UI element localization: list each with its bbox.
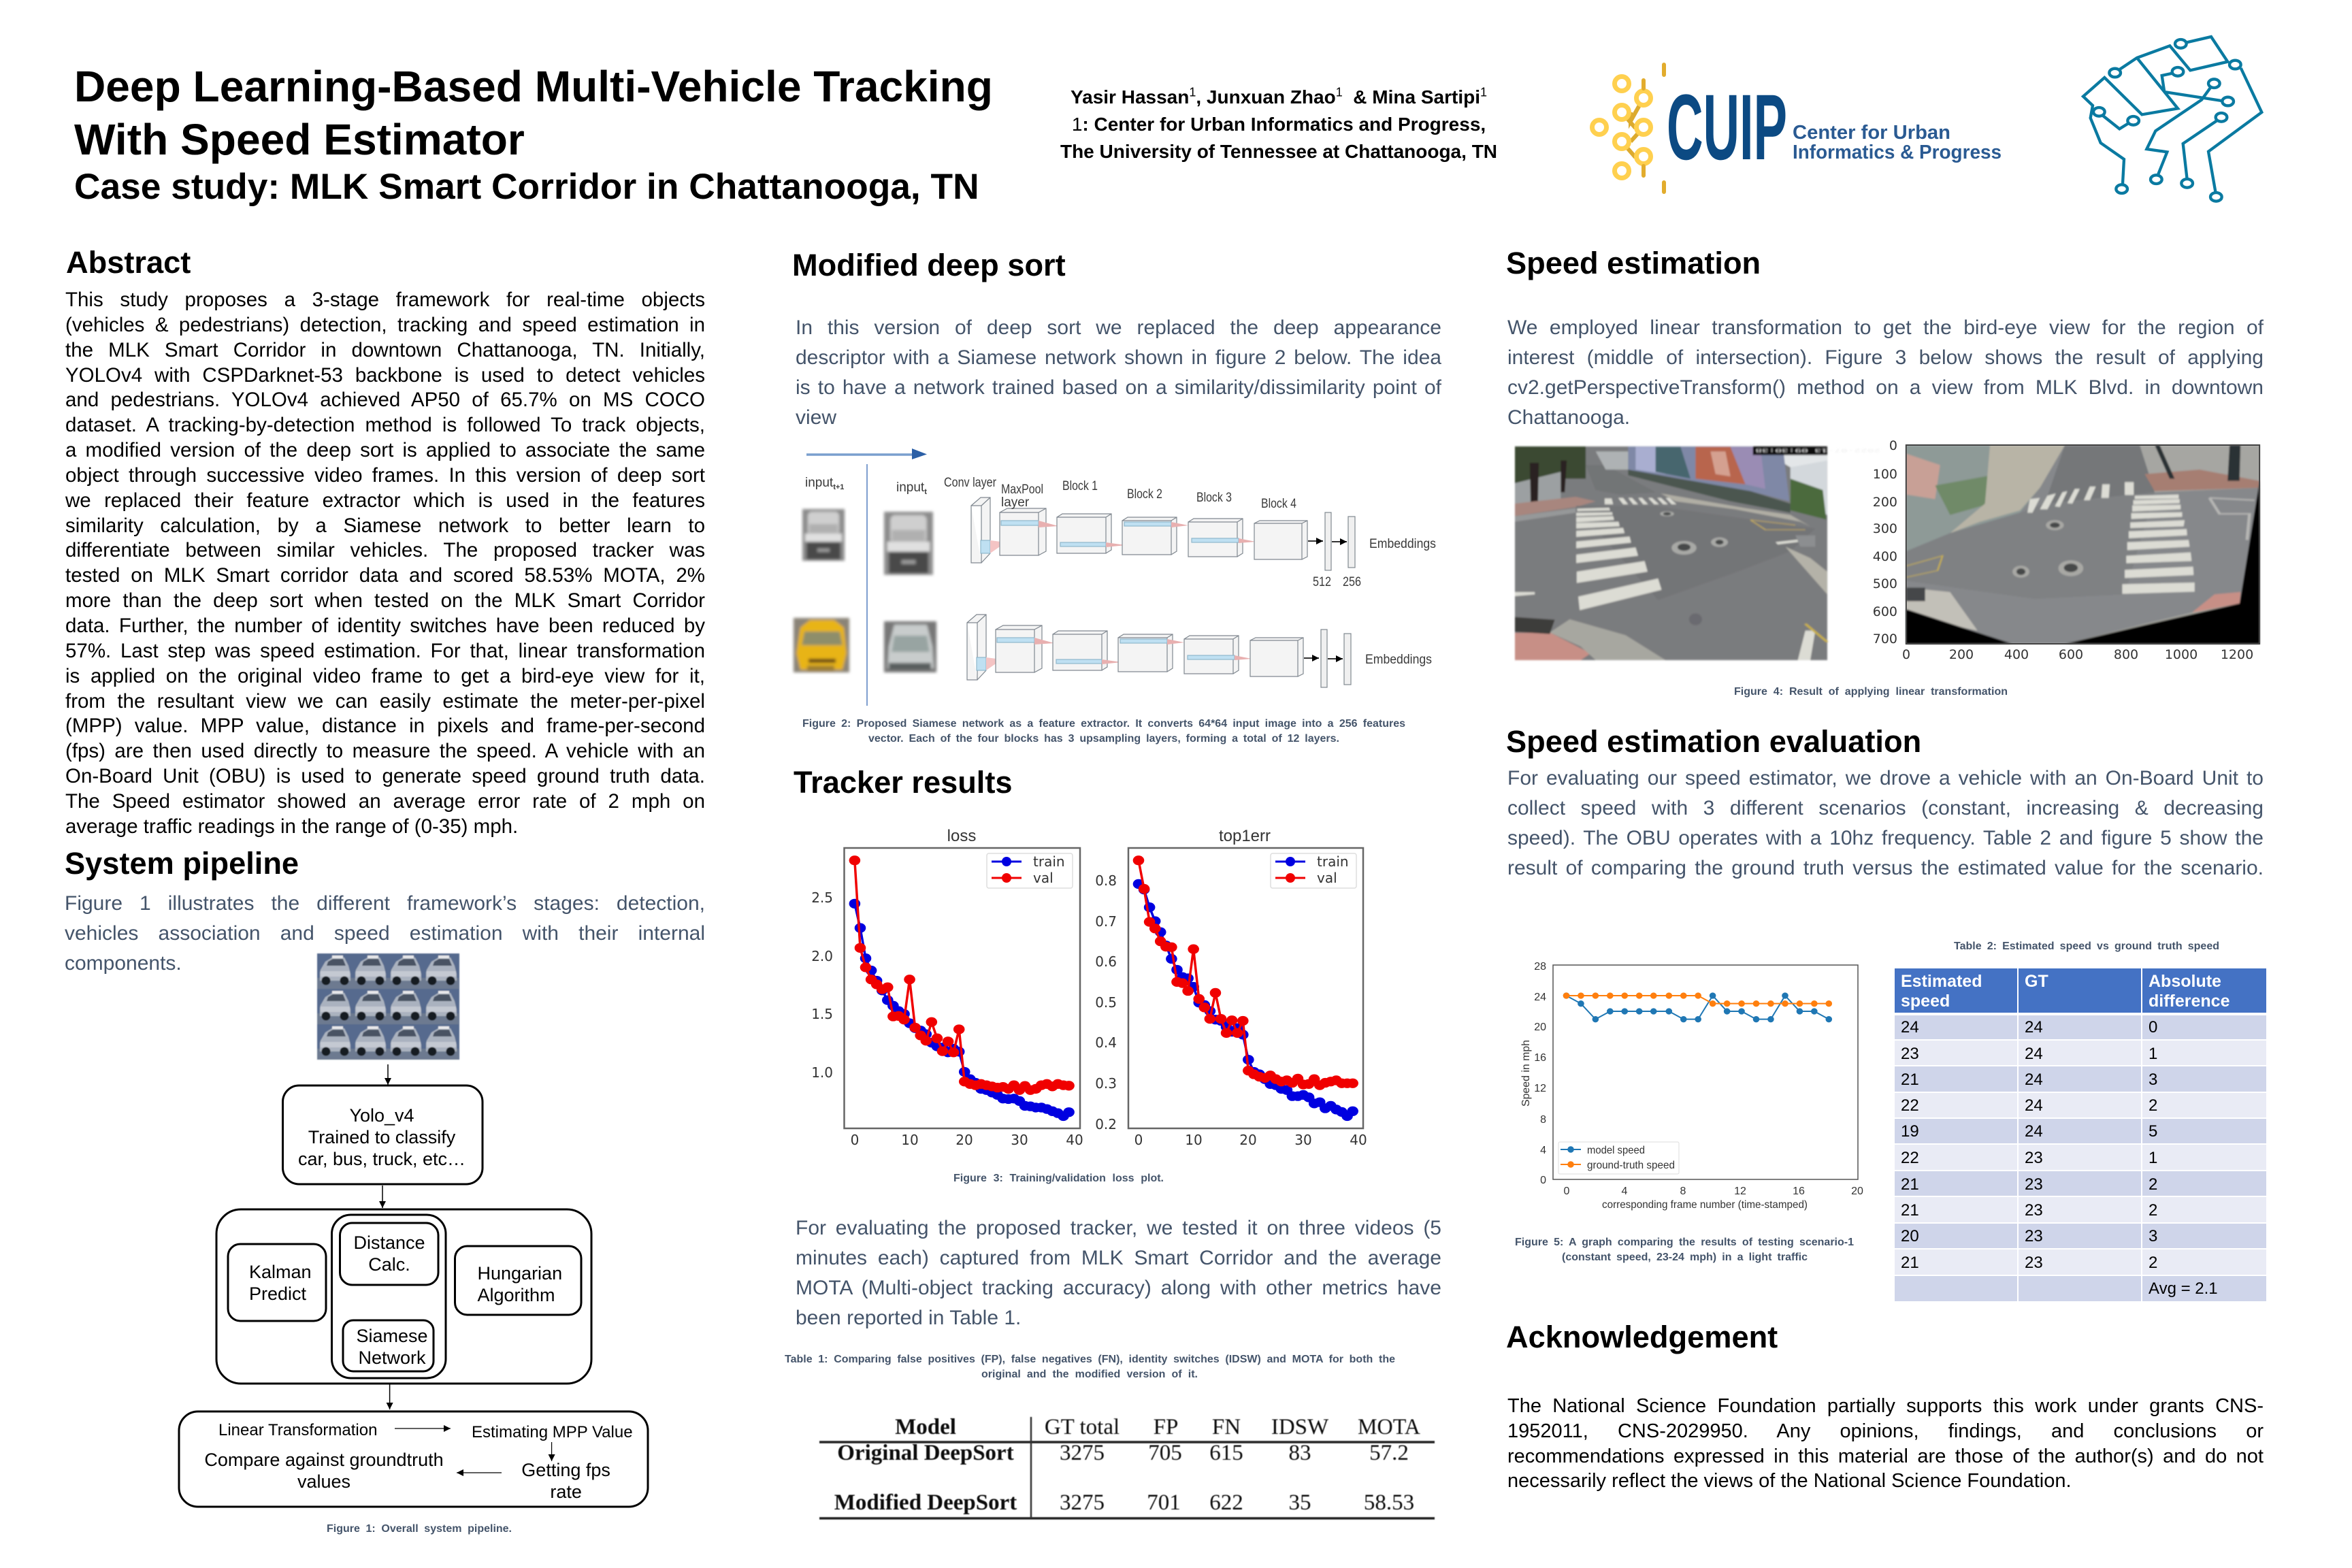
- figure 5: speed line chart: 28: [1534, 961, 1546, 973]
- legend: speed chart: ground-truth speed: [1587, 1160, 1675, 1171]
- box: Hungarian algorithm: Hungarian: [478, 1263, 562, 1284]
- image: grey car input t+1: [802, 509, 845, 561]
- text: speed estimation: interest (middle of intersection). Figure 3 below shows the result of applying: [1507, 346, 2264, 369]
- box: Siamese network: [343, 1320, 434, 1371]
- figure 5: speed line chart: 20: [1534, 1022, 1546, 1033]
- figure 1: system pipeline diagram: [179, 953, 648, 1507]
- labels: network layers: Block 1: [1062, 479, 1098, 493]
- text: system pipeline: [65, 892, 705, 975]
- labels: network layers: input: [805, 476, 833, 490]
- caption: figure 2: vector. Each of the four blocks has 3 upsampling layers, forming a total of 12 layers.: [868, 733, 1339, 745]
- labels: network layers: layer: [1001, 495, 1030, 510]
- table 1: tracker comparison: 705: [1148, 1441, 1182, 1465]
- figure 5: speed line chart: 16: [1534, 1052, 1546, 1064]
- text: tracker results: MOTA (Multi-object tracking accuracy) along with other metrics have: [796, 1277, 1441, 1299]
- axis labels: bird-eye view: 1000: [2165, 647, 2198, 662]
- chart: loss: [811, 827, 1083, 1148]
- caption: figure 5: [1515, 1237, 1854, 1263]
- table 2 values: 24: [1901, 1018, 1919, 1036]
- chart: loss: 1.5: [811, 1006, 833, 1022]
- labels: network layers: [805, 476, 1436, 667]
- text: acknowledgement: necessarily reflect the views of the National Science Foundation.: [1507, 1470, 2072, 1492]
- table 1: tracker comparison: 615: [1209, 1441, 1243, 1465]
- table 2 values: 0: [2149, 1018, 2157, 1036]
- figure 5: speed line chart: 20: [1851, 1186, 1863, 1197]
- labels: network layers: Embeddings: [1369, 537, 1436, 551]
- text: tracker results: been reported in Table 1.: [796, 1307, 1021, 1329]
- text: abstract: YOLOv4 with CSPDarknet-53 backbone is used to detect vehicles: [65, 364, 705, 387]
- series: model speed and ground truth: [1567, 996, 1829, 1019]
- box: Siamese network: Siamese: [356, 1326, 428, 1346]
- table 1: tracker comparison: Model: [895, 1415, 956, 1439]
- network blocks: bottom branch: [967, 615, 1351, 687]
- box: Yolo_v4: Yolo_v4: [349, 1105, 414, 1126]
- text: acknowledgement: recommendations expressed in this material are those of the author(s) and do not: [1507, 1446, 2264, 1467]
- chart: loss: 10: [901, 1132, 919, 1148]
- table 2 values: 21: [1901, 1254, 1919, 1272]
- box: Kalman predict: [228, 1244, 326, 1321]
- text: abstract: object through successive video frames. In this version of deep sort: [65, 464, 705, 487]
- table 2: estimated vs ground truth speed: [1895, 968, 2266, 1301]
- box: distance calc: [340, 1223, 438, 1285]
- text: abstract: The Speed estimator showed an average error rate of 2 mph on: [65, 790, 705, 813]
- table 1: tracker comparison: 3275: [1060, 1490, 1105, 1515]
- title: With Speed Estimator: [74, 115, 525, 164]
- table 2 values: 24: [2025, 1018, 2043, 1036]
- chart: top1err: 40: [1350, 1132, 1367, 1148]
- text: speed estimation: cv2.getPerspectiveTransform() method on a view from MLK Blvd. in downtown: [1507, 376, 2264, 399]
- logo wordmark CUIP: CUIP: [1667, 76, 1787, 180]
- table 2 values: 23: [2025, 1201, 2043, 1220]
- text: abstract: data. Further, the number of identity switches have been reduced by: [65, 615, 705, 637]
- caption: table 2: Table 2: Estimated speed vs ground truth speed: [1954, 941, 2219, 952]
- box: Kalman predict: Predict: [249, 1284, 307, 1304]
- table 1: tracker comparison: GT total: [1045, 1415, 1120, 1439]
- axis labels: bird-eye view: 1200: [2221, 647, 2253, 662]
- text: abstract: the MLK Smart Corridor in downtown Chattanooga, TN. Initially,: [65, 339, 705, 361]
- table 1: tracker comparison: 701: [1147, 1490, 1181, 1515]
- table 2 values: 23: [2025, 1227, 2043, 1245]
- arrow: tracker to speed: [389, 1384, 391, 1409]
- logo subtitle: Informatics & Progress: [1793, 142, 2002, 163]
- axis labels: bird-eye view: 500: [1873, 576, 1897, 591]
- text: abstract: [65, 289, 705, 838]
- chart: loss: 20: [956, 1132, 973, 1148]
- chart: top1err: 30: [1294, 1132, 1312, 1148]
- table 2 values: 24: [2025, 1045, 2043, 1063]
- box: distance calc: Distance: [353, 1232, 425, 1253]
- chart: top1err: 0.8: [1095, 872, 1117, 889]
- box: Yolo_v4: car, bus, truck, etc…: [298, 1149, 466, 1169]
- axis labels: bird-eye view: 400: [1873, 549, 1897, 564]
- table 1: tracker comparison: 622: [1209, 1490, 1243, 1515]
- table 1: tracker comparison: 83: [1289, 1441, 1311, 1465]
- text: abstract: more than the deep sort when tested on the MLK Smart Corridor: [65, 589, 705, 612]
- text: modified deep sort: is to have a network trained based on a similarity/dissimilarity point of: [796, 376, 1441, 399]
- text: system pipeline: vehicles association and speed estimation with their internal: [65, 922, 705, 945]
- figure 5: speed line chart: 8: [1680, 1186, 1686, 1197]
- figure 5: speed line chart: 12: [1534, 1083, 1546, 1094]
- text: abstract: tested on MLK Smart corridor data and scored 58.53% MOTA, 2%: [65, 564, 705, 587]
- box: Hungarian algorithm: Algorithm: [478, 1285, 555, 1305]
- text: speed estimation evaluation: result of comparing the ground truth versus the estimated value for the scenario.: [1507, 857, 2264, 879]
- axis labels: bird-eye view: 400: [2004, 647, 2029, 662]
- network blocks: top branch: [971, 497, 1355, 570]
- chart: top1err: 0.3: [1095, 1075, 1117, 1092]
- labels: network layers: Embeddings: [1365, 653, 1432, 667]
- box: speed estimation steps: Linear Transformation: [218, 1421, 377, 1439]
- axis labels: bird-eye view: 0: [1889, 438, 1897, 453]
- axis labels: bird-eye view: 300: [1873, 521, 1897, 536]
- table 2 values: 2: [2149, 1175, 2157, 1194]
- figure 5: speed line chart: 8: [1540, 1114, 1546, 1126]
- text: speed estimation evaluation: collect speed with 3 different scenarios (constant, increasing & decreasing: [1507, 797, 2264, 819]
- table 2 values: 2: [2149, 1254, 2157, 1272]
- authors and affiliation: Yasir Hassan1, Junxuan Zhao1 & Mina Sartipi1: [1071, 86, 1487, 108]
- text: abstract: average traffic readings in the range of (0-35) mph.: [65, 815, 518, 838]
- caption: figure 2: Figure 2: Proposed Siamese network as a feature extractor. It converts 64*64 input image into a 256 features: [802, 718, 1405, 730]
- chart: top1err: 0.7: [1095, 913, 1117, 930]
- table 2 values: 3: [2149, 1071, 2157, 1089]
- text: abstract: dataset. A tracking-by-detection method is followed To track objects,: [65, 414, 705, 436]
- table 1: tracker comparison: 57.2: [1369, 1441, 1409, 1465]
- heading: tracker results: Tracker results: [794, 765, 1013, 800]
- chart: top1err: 0: [1134, 1132, 1143, 1148]
- text: modified deep sort: [796, 316, 1441, 429]
- logo: circuit fist: [2083, 37, 2261, 201]
- text: speed estimation: We employed linear transformation to get the bird-eye view for the region of: [1507, 316, 2264, 339]
- text: abstract: we replaced their feature extractor which is used in the features: [65, 489, 705, 512]
- legend: loss: val: [1033, 870, 1054, 886]
- legend: speed chart: [1558, 1142, 1679, 1174]
- arrow: image to Yolo: [387, 1064, 389, 1085]
- table 2 values: 21: [1901, 1201, 1919, 1220]
- box: speed estimation steps: [179, 1411, 648, 1507]
- box: Yolo_v4: [283, 1085, 483, 1184]
- caption: table 1: [785, 1354, 1395, 1380]
- chart: loss: 2.5: [811, 889, 833, 906]
- title: Deep Learning-Based Multi-Vehicle Tracking: [74, 62, 993, 111]
- axis labels: bird-eye view: 100: [1873, 467, 1897, 482]
- table 2 values: 23: [2025, 1254, 2043, 1272]
- table 2 values: 23: [2025, 1149, 2043, 1167]
- legend: top1err: val: [1317, 870, 1337, 886]
- text: tracker results: For evaluating the proposed tracker, we tested it on three videos (5: [796, 1217, 1441, 1239]
- table 2 values: 23: [1901, 1045, 1919, 1063]
- axis labels: bird-eye view: 200: [1873, 495, 1897, 510]
- chart: top1err: 20: [1239, 1132, 1257, 1148]
- text: abstract: 57%. Last step was speed estimation. For that, linear transformation: [65, 640, 705, 662]
- figure 5: speed line chart: corresponding frame number (time-stamped): [1602, 1199, 1808, 1211]
- table 2 values: 23: [2025, 1175, 2043, 1194]
- image: vehicle crops montage: [317, 953, 459, 1060]
- table 1: tracker comparison: Modified DeepSort: [834, 1490, 1017, 1515]
- title: [74, 62, 993, 164]
- box: Kalman predict: Kalman: [249, 1262, 312, 1282]
- labels: network layers: 256: [1343, 575, 1361, 589]
- legend: speed chart: model speed: [1587, 1145, 1645, 1156]
- box: speed estimation steps: Compare against groundtruth: [204, 1450, 444, 1470]
- caption: table 1: original and the modified version of it.: [981, 1369, 1198, 1380]
- text: abstract: similarity calculation, by a Siamese network to better learn to: [65, 514, 705, 537]
- labels: network layers: Block 2: [1127, 487, 1162, 502]
- authors and affiliation: [1060, 86, 1497, 162]
- chart: top1err: [1095, 827, 1367, 1148]
- legend: top1err: train: [1317, 853, 1349, 870]
- text: abstract: is applied on the original video frame to get a bird-eye view for it,: [65, 665, 705, 687]
- chart: top1err: 10: [1185, 1132, 1203, 1148]
- text: modified deep sort: view: [796, 406, 836, 429]
- figure 5: speed line chart: 16: [1793, 1186, 1805, 1197]
- text: modified deep sort: In this version of deep sort we replaced the deep appearance: [796, 316, 1441, 339]
- table 2 values: 1: [2149, 1149, 2157, 1167]
- table 2 values: 22: [1901, 1149, 1919, 1167]
- text: abstract: a modified version of the deep sort is applied to associate the same: [65, 439, 705, 461]
- text: speed estimation evaluation: [1507, 767, 2264, 879]
- axis labels: bird-eye view: 0: [1902, 647, 1910, 662]
- authors and affiliation: 1: Center for Urban Informatics and Progress,: [1072, 114, 1486, 135]
- table 1: tracker comparison: Original DeepSort: [837, 1441, 1014, 1465]
- box: Yolo_v4: Trained to classify: [308, 1127, 456, 1147]
- text: abstract: (vehicles & pedestrians) detection, tracking and speed estimation in: [65, 314, 705, 336]
- table 2 values: 19: [1901, 1122, 1919, 1141]
- box: speed estimation steps: Estimating MPP Value: [472, 1423, 633, 1441]
- text: abstract: and pedestrians. YOLOv4 achieved AP50 of 65.7% on MS COCO: [65, 389, 705, 411]
- text: abstract: (MPP) value. MPP value, distance in pixels and frame-per-second: [65, 715, 705, 737]
- chart: loss: 30: [1011, 1132, 1028, 1148]
- heading: speed estimation evaluation: Speed estimation evaluation: [1506, 724, 1921, 759]
- heading: speed estimation: Speed estimation: [1506, 246, 1761, 280]
- heading: system pipeline: System pipeline: [65, 846, 299, 881]
- arrow: time direction: [806, 448, 927, 459]
- box: distance calc: Calc.: [368, 1254, 410, 1275]
- text: abstract: from the resultant view we can easily estimate the meter-per-pixel: [65, 690, 705, 712]
- table 2 values: 24: [2025, 1096, 2043, 1115]
- caption: figure 2: [802, 718, 1405, 745]
- table 2 values: 5: [2149, 1122, 2157, 1141]
- figure 2: Siamese network diagram: [794, 448, 1436, 706]
- box: Hungarian algorithm: [455, 1246, 581, 1315]
- image: original camera view: 2022-07-13 09:30:38: [1755, 447, 1880, 453]
- chart: loss: 40: [1066, 1132, 1083, 1148]
- table 2 header row: speed: [1901, 992, 1950, 1011]
- box: speed estimation steps: rate: [550, 1482, 582, 1502]
- chart: loss: 0: [851, 1132, 859, 1148]
- figure 5: speed line chart: 24: [1534, 992, 1546, 1003]
- image: bird-eye view plot: [1906, 445, 2259, 644]
- text: acknowledgement: 1952011, CNS-2029950. Any opinions, findings, and conclusions or: [1507, 1420, 2264, 1442]
- text: abstract: On-Board Unit (OBU) is used to generate speed ground truth data.: [65, 765, 705, 787]
- labels: network layers: t+1: [833, 483, 844, 491]
- text: speed estimation: [1507, 316, 2264, 1006]
- labels: network layers: Block 4: [1261, 497, 1296, 511]
- figure 5: speed line chart: 4: [1622, 1186, 1628, 1197]
- labels: network layers: 512: [1313, 575, 1331, 589]
- box: speed estimation steps: values: [297, 1471, 350, 1492]
- caption: figure 3: Figure 3: Training/validation loss plot.: [953, 1173, 1164, 1184]
- text: system pipeline: Figure 1 illustrates the different framework’s stages: detection,: [65, 892, 705, 915]
- table 2 values: 1: [2149, 1045, 2157, 1063]
- chart: top1err: top1err: [1219, 827, 1271, 845]
- box: tracker components: [216, 1209, 591, 1384]
- subtitle: Case study: MLK Smart Corridor in Chattanooga, TN: [74, 167, 979, 207]
- table 1: tracker comparison: MOTA: [1358, 1415, 1420, 1439]
- labels: network layers: Conv layer: [944, 476, 997, 490]
- table 1: tracker comparison: 3275: [1060, 1441, 1105, 1465]
- logo: CUIP: [1592, 65, 2002, 192]
- heading: acknowledgement: Acknowledgement: [1506, 1320, 1778, 1354]
- table 2 header row: [1895, 968, 2266, 1013]
- table 2 values: 21: [1901, 1071, 1919, 1089]
- table 1: tracker comparison: [819, 1415, 1435, 1518]
- figure 5: speed line chart: 4: [1540, 1145, 1546, 1156]
- text: tracker results: [796, 1217, 1441, 1329]
- image: silver van: [884, 621, 936, 672]
- table 2 values: 20: [1901, 1227, 1919, 1245]
- labels: network layers: t: [924, 488, 927, 496]
- table 2 header row: Estimated: [1901, 972, 1982, 991]
- axis labels: bird-eye view: 700: [1873, 632, 1897, 647]
- caption: figure 4: Figure 4: Result of applying linear transformation: [1734, 686, 2008, 698]
- table 2 values: 22: [1901, 1096, 1919, 1115]
- heading: modified deep sort: Modified deep sort: [792, 248, 1066, 282]
- figure 5: speed line chart: [1520, 961, 1863, 1211]
- figure 5: speed line chart: 0: [1564, 1186, 1570, 1197]
- box: speed estimation steps: Getting fps: [521, 1460, 610, 1480]
- labels: network layers: MaxPool: [1001, 483, 1043, 497]
- table 2 values: 2: [2149, 1201, 2157, 1220]
- chart: top1err: 0.6: [1095, 953, 1117, 970]
- image: grey car input t: [884, 512, 933, 575]
- text: speed estimation evaluation: speed). The OBU operates with a 10hz frequency. Table 2 and figure 5 show the: [1507, 827, 2264, 849]
- chart: loss: loss: [947, 827, 976, 845]
- table 1: tracker comparison: FP: [1154, 1415, 1178, 1439]
- heading: abstract: Abstract: [66, 245, 191, 280]
- chart: top1err: 0.4: [1095, 1034, 1117, 1051]
- text: speed estimation: Chattanooga.: [1507, 406, 1630, 429]
- image: yellow taxi: [794, 618, 849, 672]
- axis labels: bird-eye view: 200: [1949, 647, 1974, 662]
- text: acknowledgement: [1507, 1395, 2264, 1492]
- table 2 values: 24: [2025, 1071, 2043, 1089]
- text: tracker results: minutes each) captured from MLK Smart Corridor and the average: [796, 1247, 1441, 1269]
- text: speed estimation evaluation: For evaluating our speed estimator, we drove a vehicle with an On-Board Unit to: [1507, 767, 2264, 789]
- legend: loss: train: [1033, 853, 1065, 870]
- table 1: tracker comparison: 58.53: [1364, 1490, 1414, 1515]
- figure 3: training and validation plots: [811, 827, 1367, 1148]
- labels: network layers: Block 3: [1196, 491, 1232, 505]
- image: original camera view: [1515, 446, 1880, 660]
- text: abstract: (fps) are then used directly to measure the speed. A vehicle with an: [65, 740, 705, 762]
- caption: figure 5: Figure 5: A graph comparing the results of testing scenario-1: [1515, 1237, 1854, 1248]
- caption: table 1: Table 1: Comparing false positives (FP), false negatives (FN), identity switches (IDSW) and MOTA for both the: [785, 1354, 1395, 1365]
- table 1: tracker comparison: IDSW: [1271, 1415, 1329, 1439]
- text: modified deep sort: descriptor with a Siamese network shown in figure 2 below. The idea: [796, 346, 1441, 369]
- arrow: Yolo to tracker: [382, 1186, 383, 1208]
- table 1: tracker comparison: 35: [1289, 1490, 1311, 1515]
- labels: network layers: input: [896, 480, 924, 495]
- chart: top1err: 0.2: [1095, 1116, 1117, 1132]
- logo subtitle: [1793, 122, 2002, 163]
- axis labels: bird-eye view: [1873, 438, 2253, 662]
- table 2 values: 21: [1901, 1175, 1919, 1194]
- table 2 header row: Absolute: [2149, 972, 2221, 991]
- figure 5: speed line chart: Speed in mph: [1520, 1040, 1532, 1107]
- box: Siamese network: Network: [358, 1348, 426, 1368]
- axis labels: bird-eye view: 600: [1873, 604, 1897, 619]
- logo subtitle: Center for Urban: [1793, 122, 1950, 144]
- figure 5: speed line chart: 0: [1540, 1175, 1546, 1186]
- text: acknowledgement: The National Science Foundation partially supports this work under grants CNS-: [1507, 1395, 2264, 1417]
- table 2 header row: GT: [2025, 972, 2048, 991]
- legend: loss: [987, 853, 1073, 888]
- text: system pipeline: components.: [65, 952, 182, 975]
- text: abstract: differentiate between similar vehicles. The proposed tracker was: [65, 539, 705, 561]
- table 2 values: [1901, 1018, 2218, 1298]
- axis labels: bird-eye view: 600: [2059, 647, 2083, 662]
- figure 4: street view and bird-eye view: [1515, 438, 2259, 662]
- chart: top1err: 0.5: [1095, 994, 1117, 1011]
- table 2 values: 2: [2149, 1096, 2157, 1115]
- caption: figure 5: (constant speed, 23-24 mph) in a light traffic: [1562, 1252, 1808, 1263]
- figure 5: speed line chart: 12: [1734, 1186, 1746, 1197]
- table 2 header row: difference: [2149, 992, 2230, 1011]
- table 1: tracker comparison: FN: [1212, 1415, 1241, 1439]
- table 2 values: 24: [2025, 1122, 2043, 1141]
- icon: CUIP honeycomb nodes: [1592, 65, 1664, 192]
- table 2 values: Avg = 2.1: [2149, 1279, 2218, 1298]
- axis labels: bird-eye view: 800: [2114, 647, 2138, 662]
- legend: top1err: [1271, 853, 1356, 888]
- chart: loss: 2.0: [811, 948, 833, 964]
- authors and affiliation: The University of Tennessee at Chattanooga, TN: [1060, 141, 1497, 162]
- chart: loss: 1.0: [811, 1064, 833, 1081]
- text: abstract: This study proposes a 3-stage framework for real-time objects: [65, 289, 705, 311]
- table 2 values: 3: [2149, 1227, 2157, 1245]
- caption: figure 1: Figure 1: Overall system pipeline.: [327, 1523, 512, 1535]
